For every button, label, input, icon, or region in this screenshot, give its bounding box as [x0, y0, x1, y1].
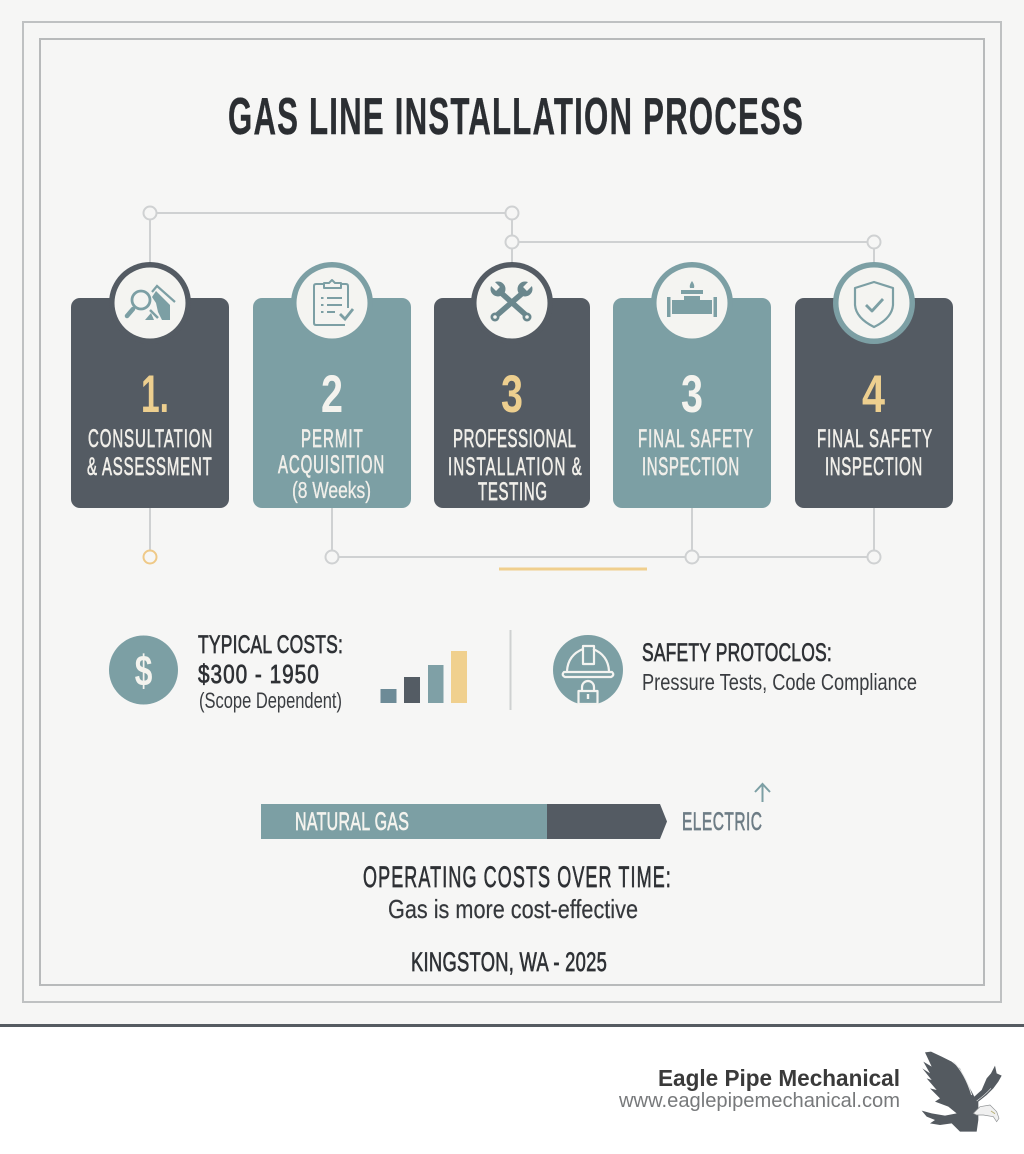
step 1 label: CONSULTATION [88, 425, 212, 453]
top connector lines [144, 206, 880, 264]
step 2 label: ACQUISITION [278, 451, 384, 479]
step 2 label: PERMIT [301, 425, 363, 453]
step 4 label: FINAL SAFETY [638, 425, 753, 453]
location and date: KINGSTON, WA - 2025 [411, 946, 607, 977]
step 5 label: FINAL SAFETY [817, 425, 932, 453]
typical costs text: (Scope Dependent) [199, 688, 342, 713]
typical costs text: TYPICAL COSTS: [198, 630, 343, 659]
icon: dollar coin: $ [135, 647, 152, 696]
step 5 label [817, 425, 932, 481]
electric label: ELECTRIC [682, 808, 762, 836]
step number 1: 1. [141, 365, 169, 424]
panel: step 1 consultation [71, 262, 229, 508]
step 3 label: PROFESSIONAL [453, 425, 576, 453]
footer company name: Eagle Pipe Mechanical [658, 1065, 900, 1091]
icon: shield with check [855, 282, 893, 327]
comparison bar: natural gas vs electric: NATURAL GAS [295, 809, 409, 836]
safety protocols text [642, 638, 917, 695]
footer company name: www.eaglepipemechanical.com [618, 1090, 900, 1112]
step 1 label: & ASSESSMENT [87, 453, 212, 481]
step number 3 second: 3 [681, 365, 703, 424]
step 5 label: INSPECTION [825, 453, 922, 481]
step 2 label: (8 Weeks) [292, 477, 371, 503]
footer company name [618, 1065, 900, 1112]
icon: gas pipe valve [667, 281, 717, 317]
step 4 label [638, 425, 753, 481]
title: GAS LINE INSTALLATION PROCESS [228, 88, 803, 146]
panel: step 5 safety inspection [795, 262, 953, 508]
step number 2: 2 [321, 365, 343, 424]
footer band [0, 1024, 1024, 1154]
arrow: up [755, 784, 770, 802]
step 4 label: INSPECTION [642, 453, 739, 481]
step number 3: 3 [501, 365, 523, 424]
safety protocols text: Pressure Tests, Code Compliance [642, 669, 917, 695]
step 3 label: TESTING [478, 478, 547, 506]
step 3 label [448, 425, 582, 506]
typical costs text [198, 630, 343, 713]
step 1 label [87, 425, 212, 481]
operating costs text: OPERATING COSTS OVER TIME: [363, 862, 671, 894]
icon: dollar coin [109, 636, 178, 704]
icon: magnifier and house [127, 286, 175, 320]
operating costs text: Gas is more cost-effective [388, 894, 638, 924]
icon: crossed wrenches [490, 281, 533, 322]
panel: step 4 safety inspection [613, 262, 771, 508]
accent line [499, 568, 647, 570]
bar chart [380, 651, 467, 703]
panel: step 2 permit [253, 262, 411, 508]
icon: hard hat and lock [553, 635, 623, 705]
step 2 label [278, 425, 384, 503]
typical costs text: $300 - 1950 [198, 660, 319, 689]
operating costs text [363, 862, 671, 924]
step 3 label: INSTALLATION & [448, 453, 582, 481]
panel: step 3 installation [434, 262, 590, 508]
bottom connector lines [144, 508, 880, 564]
comparison bar: natural gas vs electric [261, 804, 667, 839]
icon: clipboard [314, 280, 353, 325]
icon: eagle logo [922, 1052, 1002, 1132]
step number 4: 4 [862, 365, 885, 424]
safety protocols text: SAFETY PROTOCLOS: [642, 638, 832, 667]
